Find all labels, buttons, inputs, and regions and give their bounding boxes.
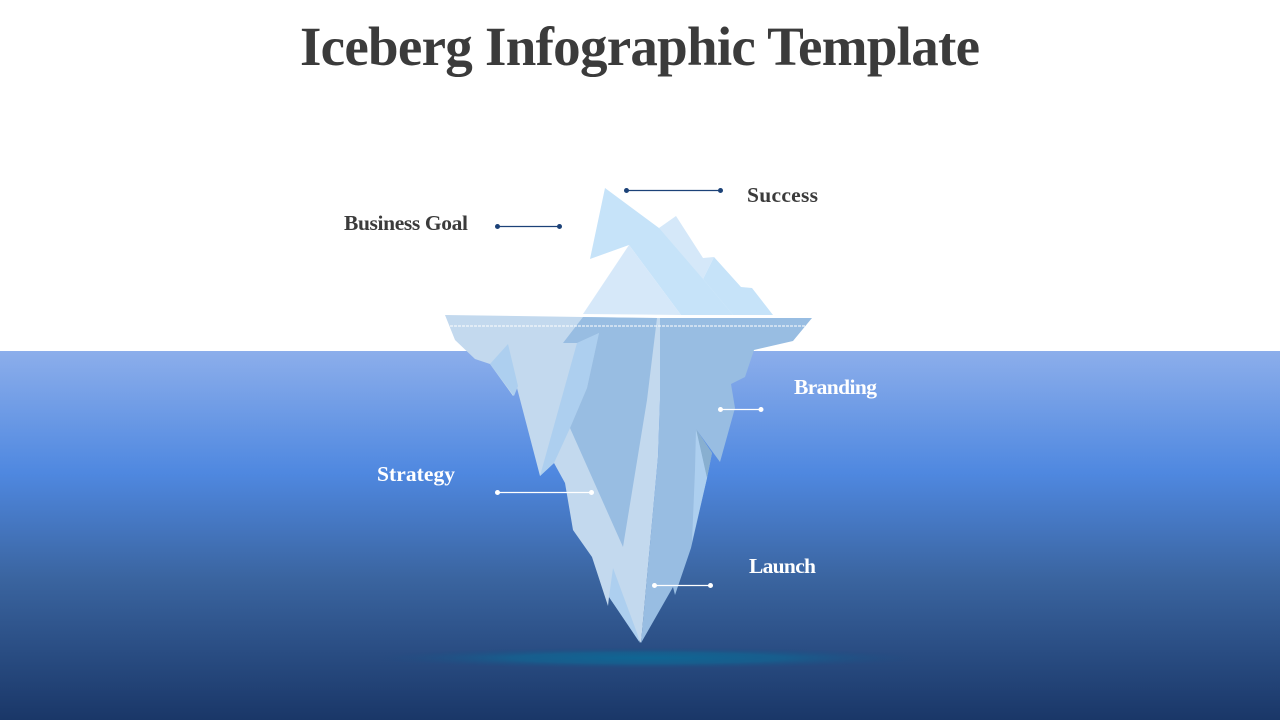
label: Business Goal: [344, 211, 562, 235]
label: Launch: [652, 554, 816, 588]
label: Success: Success: [747, 183, 818, 207]
title: Iceberg Infographic Template: [300, 16, 980, 77]
iceberg tip above water: [583, 188, 773, 315]
label: Strategy: Strategy: [377, 462, 455, 486]
iceberg illustration: [445, 188, 812, 643]
label: Business Goal: Business Goal: [344, 211, 468, 235]
label: Success: [624, 183, 818, 207]
iceberg body below water: [445, 315, 812, 643]
label: Branding: [718, 375, 877, 412]
seabed shadow: [373, 647, 923, 669]
waterline dashed: [450, 325, 806, 327]
label: Branding: Branding: [794, 375, 877, 399]
ocean background: [0, 351, 1280, 720]
label: Launch: Launch: [749, 554, 816, 578]
label: Strategy: [377, 462, 594, 495]
